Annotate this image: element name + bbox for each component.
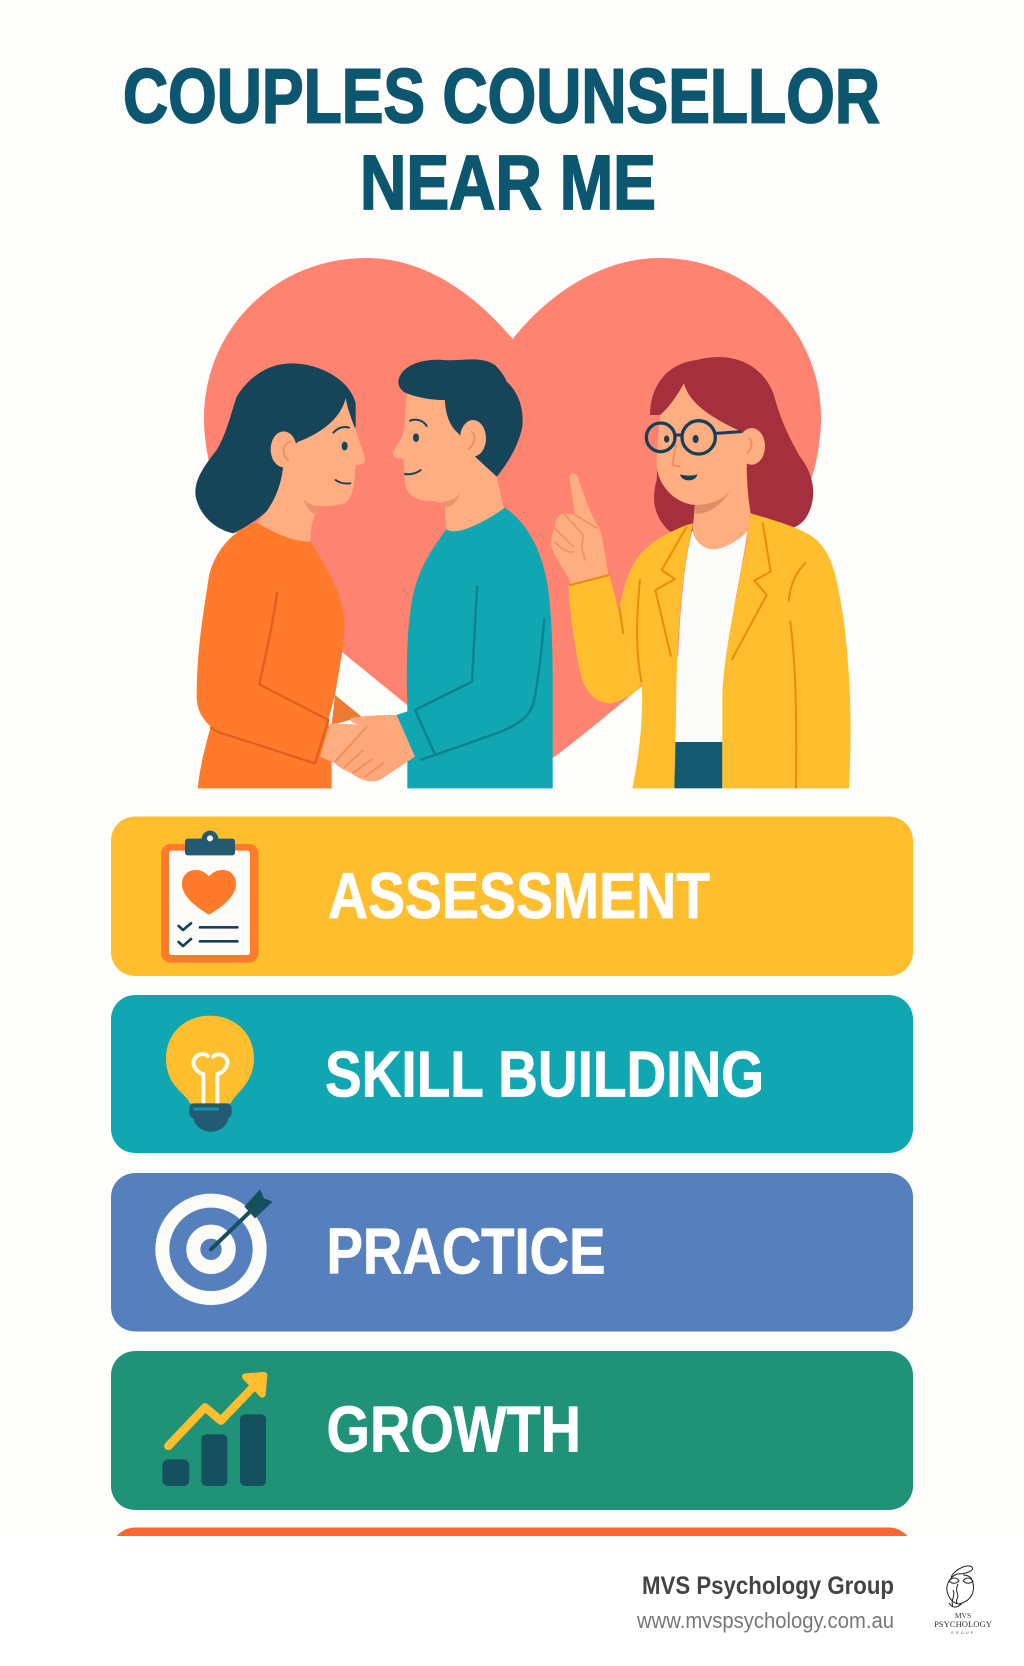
logo: MVS Psychology face and wordmark: GROUP — [951, 1630, 975, 1635]
logo: MVS Psychology face and wordmark: PSYCHOLOGY — [934, 1619, 992, 1629]
step bar: assessment: ASSESSMENT — [328, 859, 710, 932]
step bar: growth — [111, 1351, 913, 1510]
illustration: man client — [320, 359, 553, 788]
icon: rising bar chart with arrow — [162, 1375, 266, 1486]
illustration: heart background — [204, 258, 821, 787]
logo: MVS Psychology face and wordmark: MVS — [955, 1611, 971, 1620]
title: NEAR ME — [360, 140, 656, 226]
logo: MVS Psychology face and wordmark — [934, 1566, 992, 1635]
step bar: cropped fifth bar — [111, 1528, 913, 1588]
title — [123, 54, 880, 226]
footer band — [0, 1536, 1024, 1666]
footer: organisation name: MVS Psychology Group — [642, 1572, 894, 1600]
illustration: woman client — [195, 363, 365, 788]
icon: light bulb — [166, 1016, 254, 1132]
step bar: skill building: SKILL BUILDING — [325, 1038, 764, 1110]
step bar: practice — [111, 1173, 913, 1332]
step bar: assessment — [111, 816, 913, 976]
step bar: practice: PRACTICE — [326, 1214, 606, 1288]
step bar: skill building — [111, 995, 913, 1153]
step bar: growth: GROWTH — [326, 1392, 581, 1466]
illustration: counsellor — [551, 357, 851, 788]
icon: target with arrow — [162, 1189, 273, 1298]
footer: website: www.mvspsychology.com.au — [636, 1608, 894, 1633]
icon: clipboard with heart — [161, 831, 258, 963]
